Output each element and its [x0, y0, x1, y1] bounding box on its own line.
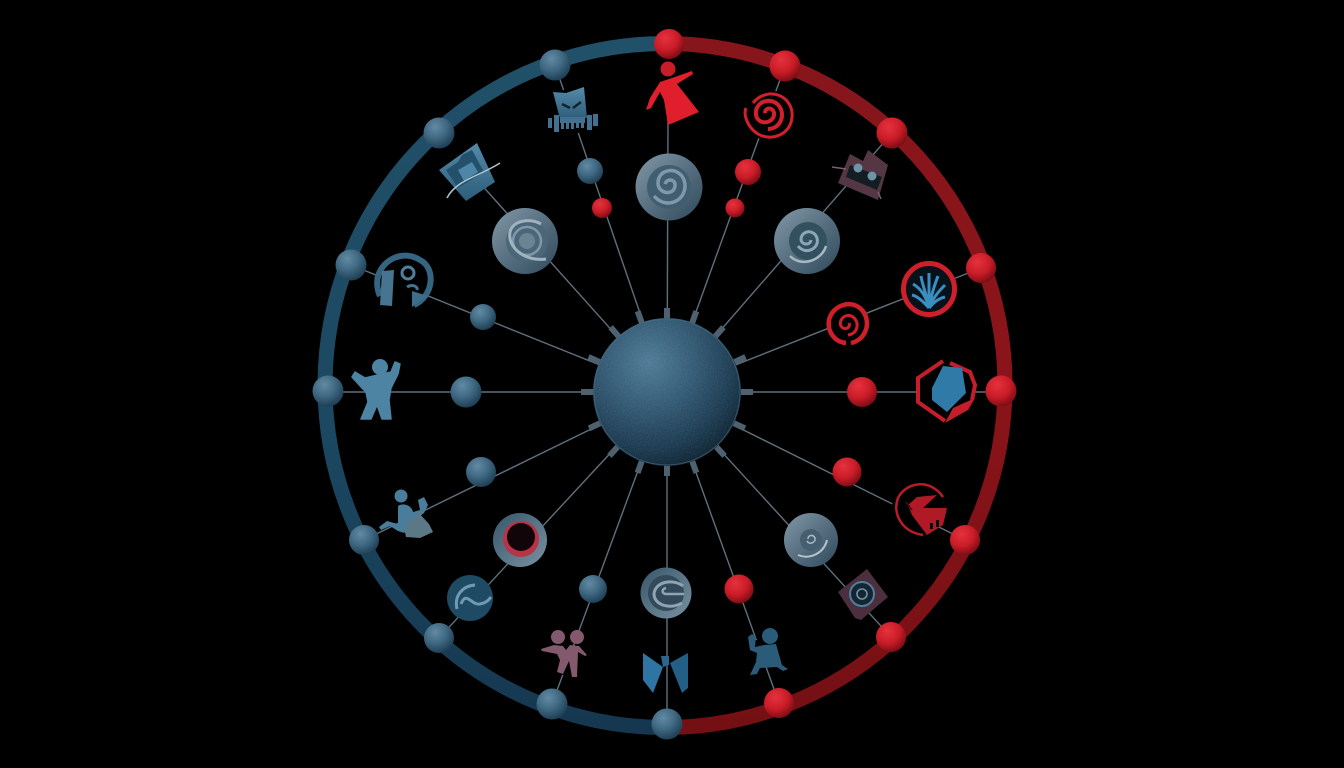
icon: pink pair of figures	[541, 630, 587, 677]
ring: blue half	[325, 44, 665, 728]
icon: red circle with blue leaf	[904, 264, 954, 314]
spiral disc: lower right	[784, 513, 838, 567]
central hub sphere	[593, 318, 741, 466]
spokes	[328, 65, 1001, 724]
icon: red spiral	[743, 90, 793, 140]
ring: red half	[665, 44, 1005, 728]
hub connectors	[581, 308, 753, 476]
red ring nodes	[654, 29, 1016, 718]
ring disc with red hole	[493, 513, 547, 567]
icon: red arc with robot arm	[892, 482, 947, 535]
inner spoke balls	[450, 158, 877, 604]
C disc: bottom	[640, 568, 692, 618]
spiral disc: upper right	[774, 208, 840, 274]
icon: red figure	[646, 60, 699, 125]
icon: blue bow	[643, 653, 688, 693]
icon: blue person arms raised	[352, 359, 400, 419]
icon: maroon box with eyes	[832, 150, 888, 200]
spiral disc: top	[636, 154, 702, 220]
icon: red spiral small	[828, 304, 868, 344]
icon: blue box	[439, 143, 500, 201]
icon: blue head in ring	[375, 253, 431, 309]
icon: blue small figure	[748, 628, 788, 675]
icon: red hexagon with blue block	[918, 361, 975, 423]
icon: blue person with shield	[379, 490, 433, 538]
icon: blue robot face	[547, 87, 599, 133]
spiral disc: upper left	[492, 208, 558, 274]
icon: maroon square with blue ring	[838, 569, 888, 620]
blue ring nodes	[312, 50, 682, 740]
wave disc	[447, 575, 493, 621]
